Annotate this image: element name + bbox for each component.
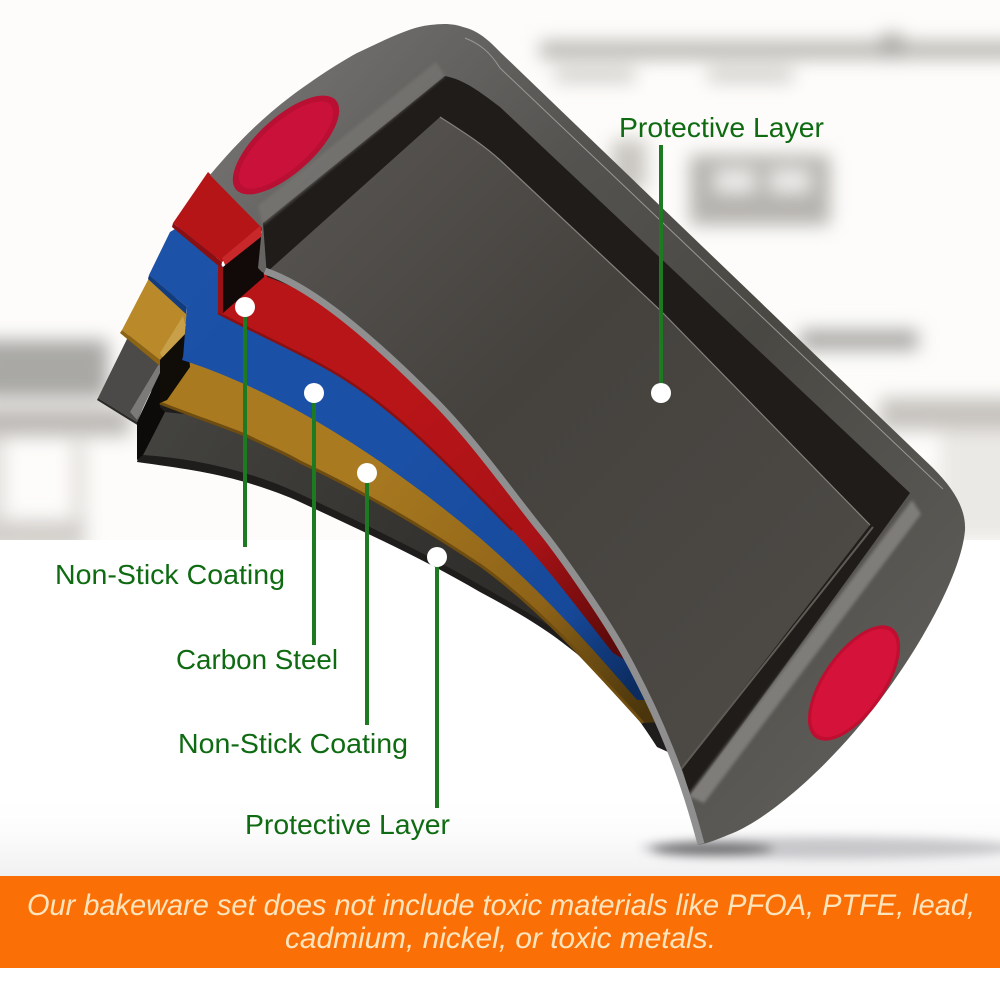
callout line and dot: non-stick coating lower bbox=[357, 463, 377, 725]
label: non-stick coating upper: Non-Stick Coating bbox=[55, 559, 285, 590]
callout line and dot: carbon steel bbox=[304, 383, 324, 645]
label: carbon steel: Carbon Steel bbox=[176, 644, 338, 675]
tray floor fine highlight bbox=[440, 117, 870, 525]
tray floor highlight lower edge bbox=[678, 527, 873, 773]
tray cut edge bbox=[265, 271, 701, 844]
tray outer rim bbox=[210, 24, 965, 845]
red silicone grip top bbox=[217, 79, 355, 211]
tray rim textured strip top bbox=[258, 62, 445, 225]
pan layer: carbon steel (blue) bbox=[148, 220, 680, 700]
tray floor bbox=[267, 117, 870, 773]
red silicone grip bottom bbox=[790, 610, 918, 756]
callout line and dot: protective layer bottom bbox=[427, 547, 447, 808]
label: protective layer top: Protective Layer bbox=[619, 112, 824, 143]
banner text: Our bakeware set does not include toxic materials like PFOA, PTFE, lead, bbox=[27, 889, 975, 922]
main baking tray bbox=[210, 24, 965, 845]
label: non-stick coating lower: Non-Stick Coating bbox=[178, 728, 408, 759]
pan layer: upper non-stick coating (red) bbox=[172, 172, 660, 680]
pan layer: lower non-stick coating (gold) bbox=[120, 268, 690, 723]
label: protective layer bottom: Protective Layer bbox=[245, 809, 450, 840]
tray inner wall bbox=[263, 76, 910, 797]
tray rim textured strip bottom bbox=[688, 500, 921, 803]
pan layer: bottom protective layer (grey) bbox=[97, 300, 690, 752]
tray rim fine highlight bbox=[465, 38, 943, 489]
callout line and dot: non-stick coating upper bbox=[235, 297, 255, 547]
banner text: cadmium, nickel, or toxic metals. bbox=[285, 922, 716, 955]
orange disclaimer banner bbox=[0, 876, 1000, 968]
cast shadow under the tray bbox=[640, 837, 1000, 859]
callout line and dot: protective layer top bbox=[651, 145, 671, 403]
